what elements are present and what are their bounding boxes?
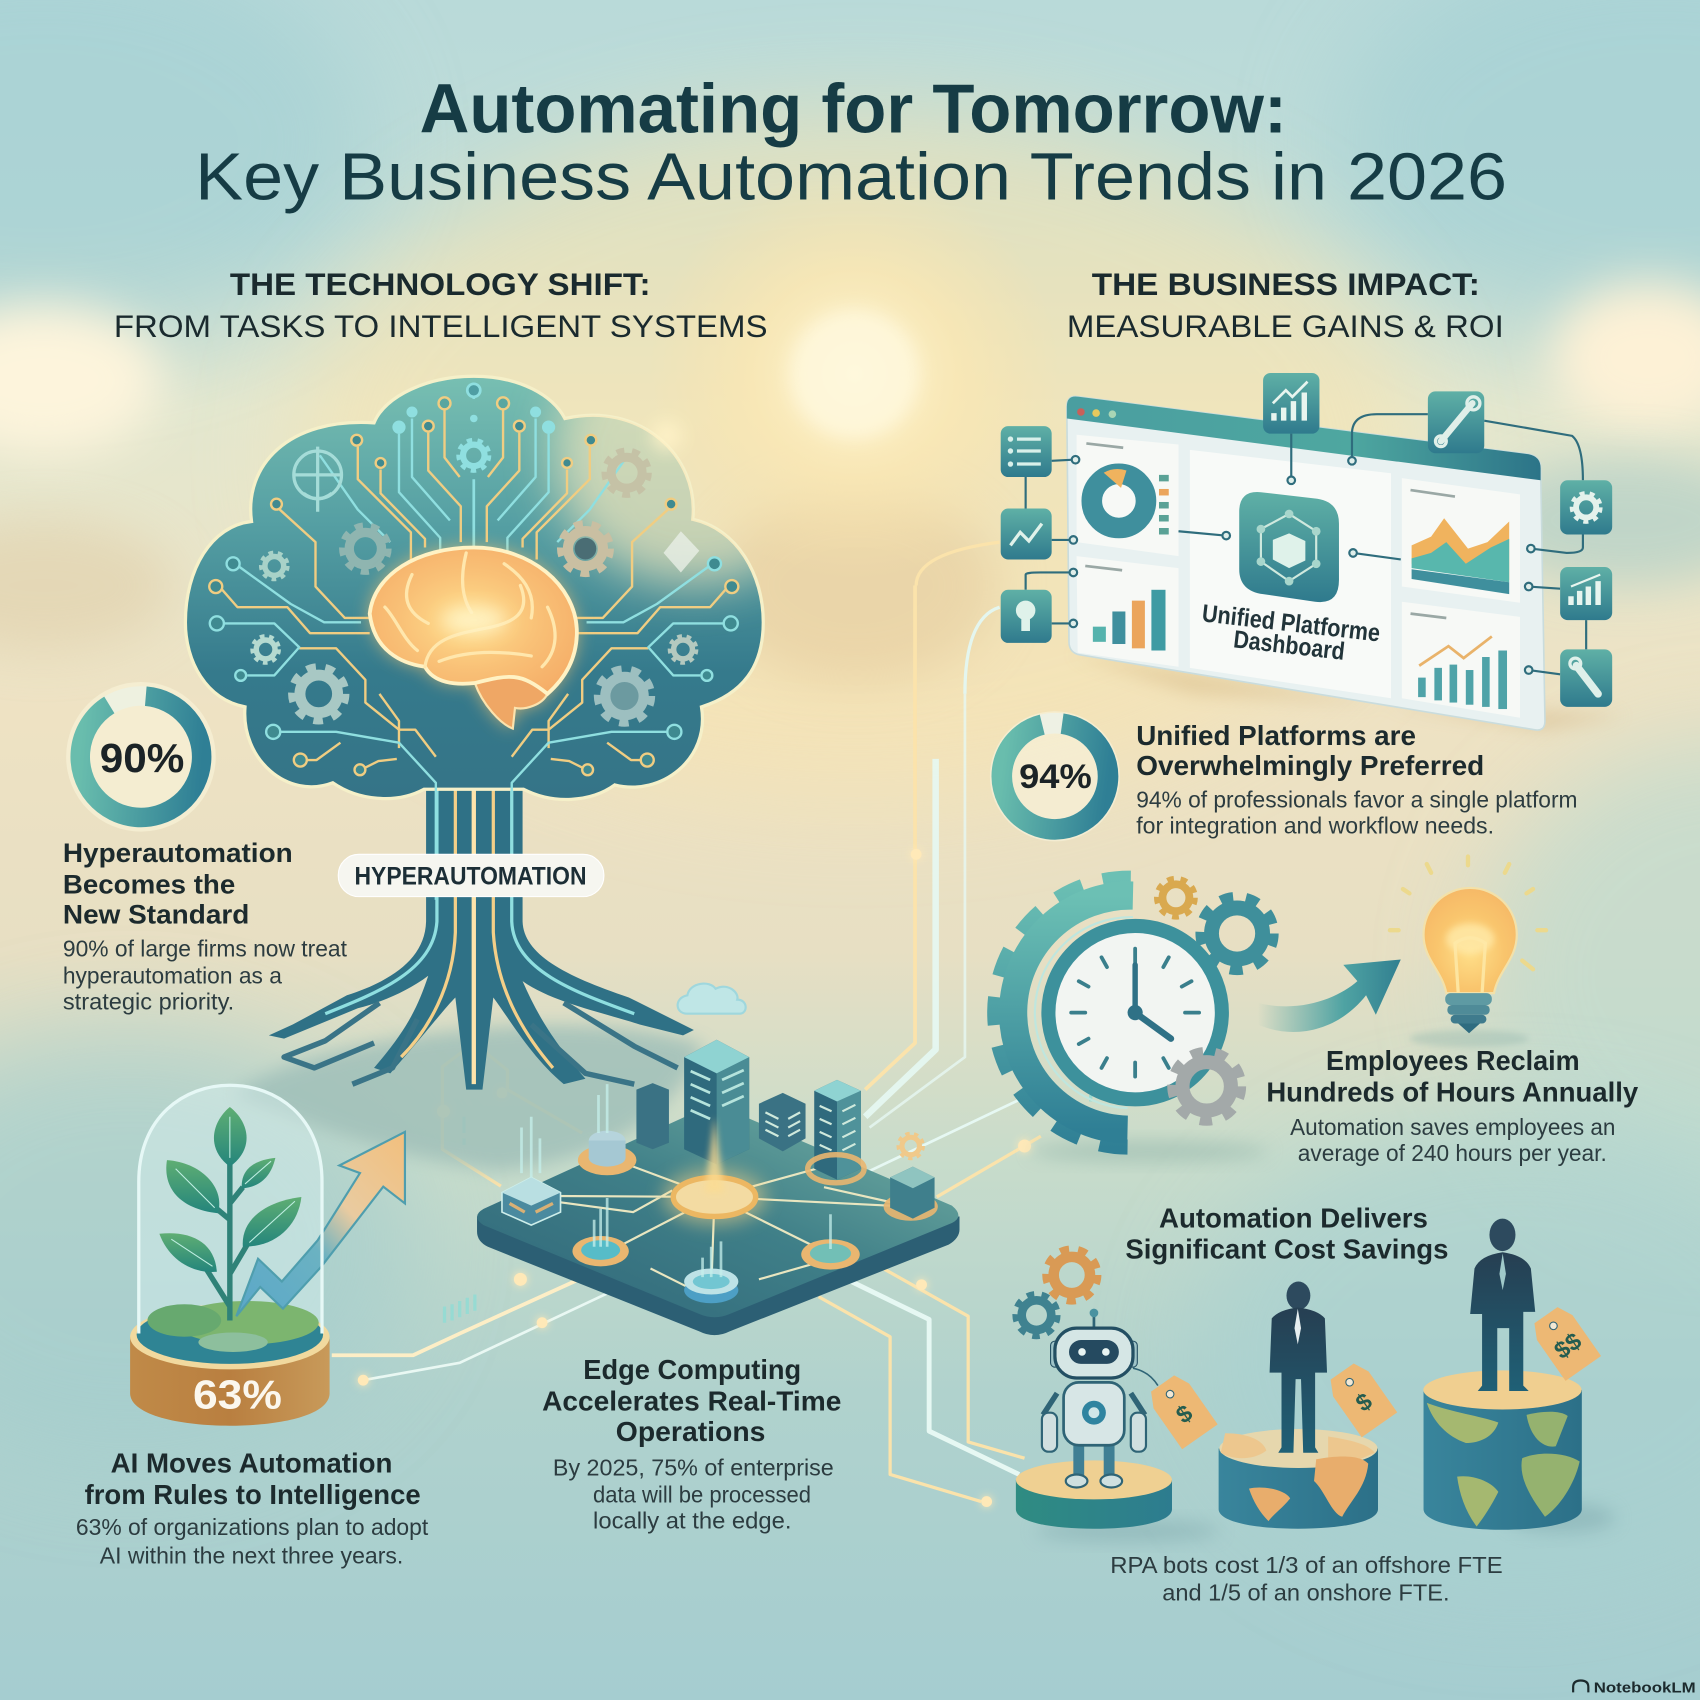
connector lines between sections xyxy=(332,542,1091,1507)
text: hyperautomation stat: hyperautomation as a xyxy=(63,962,282,988)
gears in the canopy xyxy=(252,440,699,723)
text: unified platforms: Unified Platforms are xyxy=(1136,719,1416,751)
heading: the technology shift: FROM TASKS TO INTELLIGENT SYSTEMS xyxy=(114,309,768,344)
text: hyperautomation stat xyxy=(63,837,348,1014)
title: Automating for Tomorrow: xyxy=(420,69,1287,147)
growth chart card xyxy=(1402,602,1520,718)
text: unified platforms: 94% of professionals favor a single platform xyxy=(1136,787,1577,813)
text: AI moves automation: 63% of organizations plan to adopt xyxy=(76,1514,429,1540)
glowing nodes xyxy=(521,1084,938,1303)
cloud icon xyxy=(678,984,746,1014)
platform slab xyxy=(477,1107,960,1335)
price tag: offshore xyxy=(1324,1359,1397,1437)
90% donut stat xyxy=(66,682,216,832)
text: cost savings heading: Significant Cost Savings xyxy=(1125,1233,1448,1265)
network lines xyxy=(531,1157,911,1290)
grey gear xyxy=(1172,1052,1241,1121)
hyperautomation label pill xyxy=(338,854,604,897)
window frame xyxy=(1067,396,1545,730)
icon: list xyxy=(1001,426,1052,477)
title xyxy=(195,69,1507,214)
text: AI moves automation xyxy=(76,1446,429,1568)
text: edge computing xyxy=(542,1353,841,1534)
bar chart card xyxy=(1077,556,1179,667)
text: employees reclaim xyxy=(1266,1044,1639,1166)
icon tiles xyxy=(1001,373,1612,707)
donut chart card xyxy=(1077,435,1179,556)
price tag: offshore: $ xyxy=(1351,1388,1377,1418)
icon: bar chart xyxy=(1560,567,1612,620)
icon: trend line xyxy=(1001,508,1052,559)
price tag: onshore: $$ xyxy=(1549,1328,1587,1365)
area chart card xyxy=(1402,478,1520,603)
offshore worker on podium xyxy=(1219,1282,1378,1529)
dashboard label: Dashboard xyxy=(1232,625,1346,666)
onshore worker on podium xyxy=(1423,1219,1615,1533)
cost comparison figures xyxy=(1015,1219,1615,1542)
glass dome outline xyxy=(139,1085,322,1334)
text: edge computing: Operations xyxy=(616,1415,765,1447)
glass dome interior xyxy=(139,1085,322,1334)
text: cost comparison xyxy=(1110,1552,1503,1605)
text: cost comparison: and 1/5 of an onshore FTE. xyxy=(1162,1579,1450,1605)
text: AI moves automation: AI within the next three years. xyxy=(100,1542,403,1568)
text: cost comparison: RPA bots cost 1/3 of an offshore FTE xyxy=(1110,1552,1503,1578)
icon: wrench xyxy=(1428,391,1484,453)
seedling xyxy=(159,1107,301,1321)
text: employees reclaim: Hundreds of Hours Annually xyxy=(1266,1076,1639,1108)
clock and gears xyxy=(995,878,1273,1162)
text: employees reclaim: Employees Reclaim xyxy=(1326,1044,1580,1076)
unified platform dashboard xyxy=(1001,373,1626,730)
text: unified platforms: for integration and workflow needs. xyxy=(1136,813,1494,839)
heading: the business impact xyxy=(1067,267,1504,344)
94% donut stat: 94% xyxy=(1019,758,1092,796)
icon: rising chart xyxy=(1263,373,1319,434)
hyperautomation label pill: HYPERAUTOMATION xyxy=(355,863,587,891)
text: edge computing: locally at the edge. xyxy=(593,1508,791,1534)
text: hyperautomation stat: Becomes the xyxy=(63,868,235,899)
robot on podium xyxy=(1015,1249,1220,1542)
text: employees reclaim: average of 240 hours per year. xyxy=(1298,1140,1607,1166)
tree canopy xyxy=(184,374,765,801)
dome pedestal xyxy=(130,1301,330,1426)
90% donut stat: 90% xyxy=(100,735,184,781)
heading: the technology shift: THE TECHNOLOGY SHIFT: xyxy=(230,267,651,302)
tree trunk and roots xyxy=(269,683,694,1090)
dashboard label: Unified Platforme xyxy=(1201,599,1382,647)
text: edge computing: data will be processed xyxy=(593,1482,811,1508)
NotebookLM watermark: NotebookLM xyxy=(1594,1679,1696,1696)
heading: the business impact: THE BUSINESS IMPACT: xyxy=(1092,267,1480,302)
text: edge computing: Accelerates Real-Time xyxy=(542,1385,841,1417)
curved arrow to light bulb xyxy=(1258,960,1401,1032)
dashboard shadow xyxy=(1069,653,1626,730)
text: unified platforms xyxy=(1136,719,1577,839)
dashboard label xyxy=(1201,599,1382,666)
light bulb icon xyxy=(1390,857,1546,1047)
text: employees reclaim: Automation saves employees an xyxy=(1290,1114,1615,1140)
large gear xyxy=(995,878,1133,1147)
price tag: robot xyxy=(1145,1371,1218,1449)
circuit traces xyxy=(209,384,738,900)
small gears xyxy=(1157,879,1273,970)
63% figure: 63% xyxy=(193,1371,282,1417)
price tag: robot: $ xyxy=(1171,1400,1198,1429)
icon: gear xyxy=(1560,480,1612,535)
centre card xyxy=(1190,450,1391,698)
ground hill under the tree xyxy=(233,1025,705,1171)
heading: the business impact: MEASURABLE GAINS & ROI xyxy=(1067,309,1504,344)
plant under glass dome with growth arrow xyxy=(130,1085,405,1426)
connector wires and ports xyxy=(1026,414,1586,674)
server towers xyxy=(502,1040,923,1225)
text: cost savings heading xyxy=(1125,1201,1448,1265)
title: Key Business Automation Trends in 2026 xyxy=(195,139,1507,214)
text: cost savings heading: Automation Delivers xyxy=(1159,1201,1428,1233)
price tag: onshore xyxy=(1528,1303,1601,1381)
edge computing platform xyxy=(477,984,960,1335)
growth arrow xyxy=(236,1132,405,1316)
text: edge computing: Edge Computing xyxy=(583,1353,801,1385)
text: hyperautomation stat: New Standard xyxy=(63,899,249,930)
text: unified platforms: Overwhelmingly Preferred xyxy=(1136,749,1484,781)
94% donut stat xyxy=(990,711,1120,841)
clock face xyxy=(1048,926,1222,1099)
text: edge computing: By 2025, 75% of enterprise xyxy=(553,1455,834,1481)
heading: the technology shift xyxy=(114,267,768,344)
text: AI moves automation: AI Moves Automation xyxy=(111,1446,392,1478)
icon: tool xyxy=(1560,649,1612,707)
hyperautomation tree xyxy=(184,374,765,1090)
glowing brain xyxy=(370,548,577,729)
text: AI moves automation: from Rules to Intelligence xyxy=(85,1478,421,1510)
text: hyperautomation stat: 90% of large firms now treat xyxy=(63,935,348,961)
text: hyperautomation stat: Hyperautomation xyxy=(63,837,293,868)
text: hyperautomation stat: strategic priority. xyxy=(63,988,234,1014)
icon: light bulb xyxy=(1001,590,1052,643)
